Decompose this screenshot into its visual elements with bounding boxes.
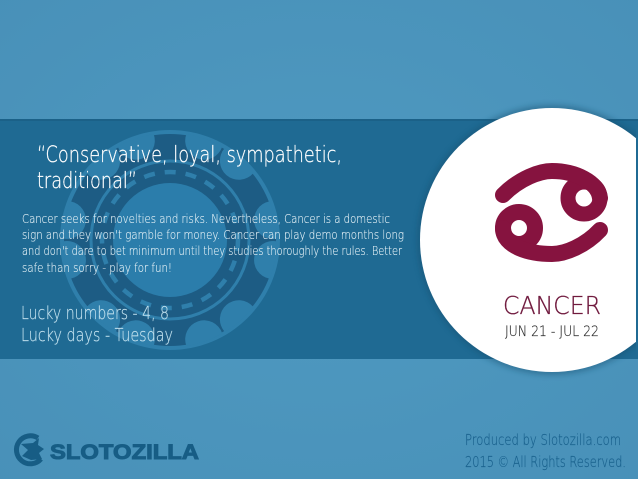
description text: Cancer seeks for novelties and risks. Nevertheless, Cancer is a domestic	[22, 211, 390, 226]
credits	[465, 431, 626, 471]
sign dates: JUN 21 - JUL 22	[505, 324, 599, 340]
lucky numbers and days	[21, 303, 173, 346]
description text	[22, 211, 404, 275]
quote heading: traditional”	[37, 169, 137, 194]
sign name: CANCER	[503, 291, 601, 320]
poker chip watermark	[60, 130, 280, 350]
description text: and don't dare to bet minimum until they studies thoroughly the rules. Better	[22, 243, 403, 258]
dark band panel	[0, 119, 638, 359]
description text: sign and they won't gamble for money. Cancer can play demo months long	[22, 227, 404, 242]
quote heading	[37, 143, 342, 194]
quote heading: “Conservative, loyal, sympathetic,	[37, 143, 342, 168]
wordmark: SLOTOZILLA	[50, 441, 199, 464]
lucky numbers and days: Lucky numbers - 4, 8	[21, 303, 169, 324]
icon: dragon ring	[16, 436, 44, 464]
logo: slotozilla	[16, 436, 199, 464]
description text: safe than sorry - play for fun!	[22, 260, 172, 275]
icon: cancer glyph	[503, 171, 600, 254]
lucky numbers and days: Lucky days - Tuesday	[21, 325, 173, 346]
white circle with sign	[417, 105, 638, 375]
